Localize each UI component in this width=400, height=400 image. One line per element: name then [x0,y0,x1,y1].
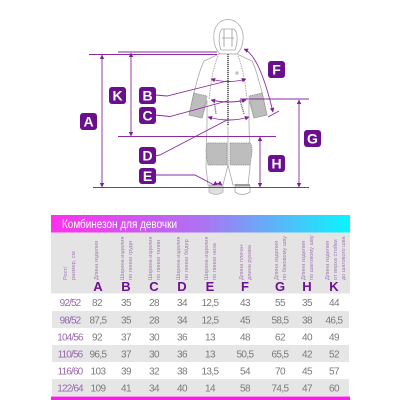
row 122/64: 40 [177,384,188,394]
row 104/56: 30 [149,332,160,344]
column headings: по линии низа [212,242,218,280]
row 98/52: 34 [177,316,188,326]
column headings: длина рукава [247,244,253,280]
row 104/56: 48 [240,332,251,344]
row 104/56: 13 [205,332,216,344]
column headings: B [121,279,131,294]
badge B [139,87,156,104]
row 92/52: 43 [240,298,251,309]
row 110/56: 30 [149,350,160,360]
placket stitching [209,56,247,100]
garment drawing: overall [189,20,267,194]
column headings: Ширина изделия [148,237,154,280]
row 92/52: 92/52 [60,298,82,309]
row 122/64: 47 [302,384,313,394]
row 110/56: 52 [329,350,340,360]
row 92/52: 12,5 [201,298,220,309]
column headings: размер, см [71,251,77,280]
measurement lines [89,49,309,188]
column headings: от верха стойки [332,239,339,280]
left knee patch [206,143,227,165]
row 122/64: 60 [329,384,340,394]
badge G: G [307,130,318,146]
row 116/60: 103 [91,366,106,378]
column headings: E [206,279,215,294]
badge D [139,147,156,164]
column headings: по линии груди [128,241,134,280]
row 122/64: 41 [121,384,132,394]
row 104/56: 40 [302,332,313,344]
row 110/56: 13 [205,350,216,360]
column headings: по шаговому шву [309,235,315,280]
badge C [139,107,156,124]
badge G [304,130,321,147]
row 92/52: 55 [275,298,286,309]
row 98/52: 87,5 [89,316,108,326]
column headings: Ширина изделия [176,237,182,280]
column headings: до шагового шва [341,235,347,280]
row 92/52: 34 [177,298,188,309]
row 92/52: 35 [302,298,313,309]
row 110/56: 37 [121,350,132,360]
row 98/52: 98/52 [60,316,82,326]
column headings: C [149,279,159,294]
table title: Комбинезон для девочки [62,219,177,231]
column headings: A [93,279,103,294]
badge E [139,168,156,184]
row 110/56: 65,5 [271,350,290,360]
badge D: D [142,148,153,164]
row 92/52 [60,298,340,309]
column headings: Длина изделия [274,241,280,280]
column headings: Ширина изделия [204,237,210,280]
row 98/52: 58,5 [271,316,290,326]
row 98/52: 38 [302,316,313,326]
column headings: Ширина изделия [120,237,126,280]
badge B: B [142,88,153,104]
row 98/52: 28 [149,316,160,326]
column headings: Длина плеча+ [239,244,245,280]
row 104/56 [57,332,340,344]
badge H: H [271,156,282,172]
column headings: Длина изделия [301,241,307,280]
badge K: K [112,88,123,104]
row 116/60: 38 [177,366,188,378]
chest emblem [235,71,239,75]
row 92/52: 28 [149,298,160,309]
badge F: F [272,62,281,78]
hood [214,20,243,54]
row 122/64: 58 [240,384,251,394]
row 110/56: 96,5 [89,350,108,360]
row 122/64 [52,379,349,396]
row 110/56: 36 [177,350,188,360]
badge C: C [142,108,153,124]
row 116/60: 13,5 [201,366,220,378]
column headings: G [275,279,285,294]
row 110/56: 42 [302,350,313,360]
row 122/64: 109 [91,384,106,394]
badge F [268,61,285,78]
row 116/60: 57 [329,366,340,378]
column headings: по линии талии [156,240,162,280]
row 104/56: 104/56 [57,332,84,344]
table header band [51,215,350,232]
row 116/60: 45 [302,366,313,378]
column headings: D [177,279,187,294]
row 98/52: 45 [240,316,251,326]
row 92/52: 82 [92,298,103,309]
column headings: H [302,279,312,294]
zipper [227,54,229,126]
right knee patch [230,143,252,165]
body and sleeves [189,54,267,185]
row 92/52: 35 [121,298,132,309]
row 98/52 [52,311,349,328]
right foot [235,186,250,194]
row 110/56: 50,5 [236,350,255,360]
column headings: Длина изделия [325,241,331,280]
column headings: Длина изделия [94,241,100,280]
row 98/52: 35 [121,316,132,326]
row 98/52: 46,5 [325,316,344,326]
row 110/56: 110/56 [58,350,84,360]
column headings: Рост/ [63,266,69,280]
row 122/64: 14 [205,384,216,394]
badge K [109,87,126,104]
row 104/56: 36 [177,332,188,344]
column headings: K [329,279,339,294]
left foot [209,186,223,194]
row 122/64: 122/64 [57,384,84,394]
badge A [80,113,97,130]
row 104/56: 92 [92,332,103,344]
badge A: A [83,114,94,130]
right cuff [249,93,267,118]
row 122/64: 34 [149,384,160,394]
column headings: по линии бёдер [184,239,190,280]
row 122/64: 74,5 [271,384,290,394]
column headings: по боковому шву [282,236,288,280]
badge E: E [143,168,152,184]
row 104/56: 49 [329,332,340,344]
row 92/52: 44 [329,298,340,309]
row 110/56 [52,345,349,362]
row 116/60: 32 [149,366,160,378]
right pocket [240,100,244,114]
right foot cuff [235,184,250,186]
row 116/60: 39 [121,366,132,378]
left pocket [214,100,216,114]
row 116/60: 116/60 [58,366,84,378]
row 104/56: 62 [275,332,286,344]
row 98/52: 12,5 [201,316,220,326]
column headings: F [241,279,249,294]
row 116/60: 54 [240,366,251,378]
column headings [51,232,350,294]
bottom magenta bar [51,396,350,400]
row 116/60 [58,366,340,378]
left cuff [189,93,207,118]
row 116/60: 70 [275,366,286,378]
row 104/56: 37 [121,332,132,344]
badge H [268,155,285,172]
